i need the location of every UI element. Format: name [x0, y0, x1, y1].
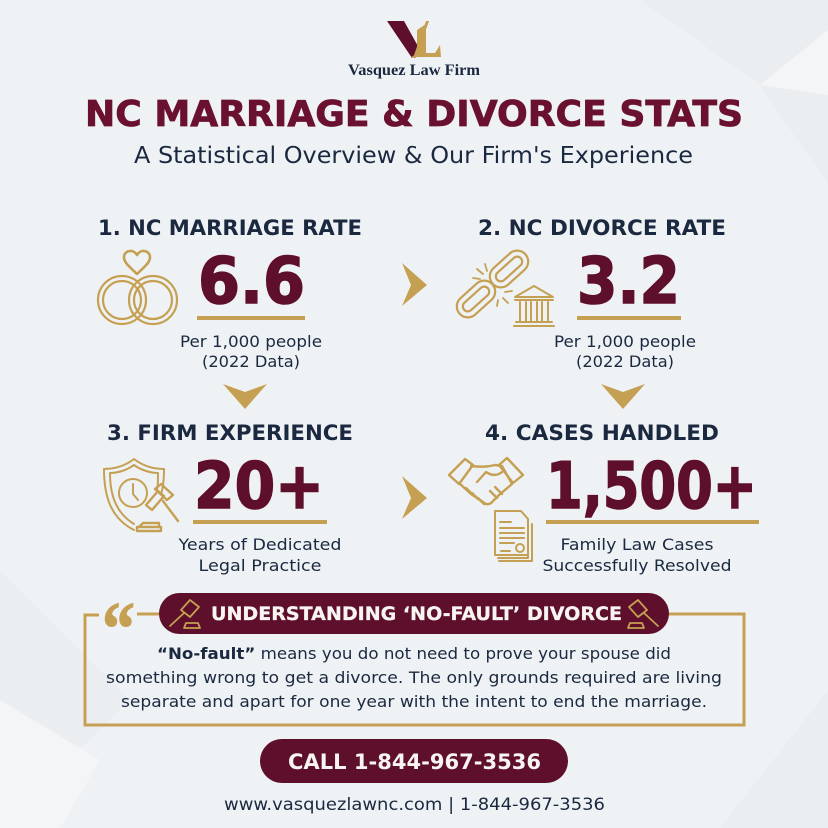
banner heading: UNDERSTANDING ‘NO-FAULT’ DIVORCE — [211, 603, 622, 625]
icon: broken chain and courthouse — [452, 246, 554, 326]
caption: (2022 Data) — [576, 352, 674, 371]
caption: Legal Practice — [198, 556, 322, 575]
caption — [177, 535, 342, 575]
banner — [159, 593, 669, 634]
caption — [180, 332, 322, 371]
arrow: right — [402, 476, 427, 519]
statistic 1,500+: 1,500+ — [546, 450, 757, 524]
caption — [542, 535, 732, 575]
heading: 1. NC MARRIAGE RATE — [98, 216, 362, 240]
callout: no-fault divorce — [85, 587, 744, 725]
caption: Per 1,000 people — [554, 332, 696, 351]
icon: quote mark: “ — [102, 587, 135, 671]
caption: Years of Dedicated — [177, 535, 342, 554]
panel: firm experience — [104, 421, 353, 575]
statistic 3.2: 3.2 — [577, 245, 680, 319]
panel: NC marriage rate — [98, 216, 362, 371]
caption: Successfully Resolved — [542, 556, 732, 575]
callout text — [106, 644, 722, 711]
heading: 3. FIRM EXPERIENCE — [107, 421, 353, 445]
footer contact line: www.vasquezlawnc.com | 1-844-967-3536 — [224, 795, 605, 815]
call button: CALL 1-844-967-3536 — [288, 750, 541, 774]
heading: 2. NC DIVORCE RATE — [478, 216, 726, 240]
callout text: something wrong to get a divorce. The only grounds required are living — [106, 668, 722, 687]
call button — [260, 739, 568, 783]
callout text: “No-fault” means you do not need to prove your spouse did — [157, 644, 671, 663]
icon: gavel left — [170, 600, 200, 628]
arrow: right — [402, 263, 427, 306]
icon: rings and heart — [98, 251, 177, 324]
subtitle: A Statistical Overview & Our Firm's Experience — [134, 143, 693, 169]
heading: 4. CASES HANDLED — [485, 421, 719, 445]
title: NC MARRIAGE & DIVORCE STATS — [85, 94, 743, 135]
icon: gavel right — [628, 600, 658, 628]
panel: NC divorce rate — [452, 216, 726, 371]
logo monogram VL — [387, 21, 441, 58]
arrow: down left — [223, 384, 267, 409]
callout text: separate and apart for one year with the intent to end the marriage. — [121, 692, 707, 711]
icon: shield clock gavel — [104, 459, 178, 531]
statistic 20+: 20+ — [194, 450, 324, 524]
panel: cases handled — [449, 421, 759, 575]
callout frame — [85, 614, 744, 725]
logo: Vasquez Law Firm — [348, 21, 481, 79]
arrow: down right — [601, 384, 645, 409]
caption: Per 1,000 people — [180, 332, 322, 351]
caption: Family Law Cases — [560, 535, 714, 554]
statistic 6.6: 6.6 — [198, 245, 305, 319]
icon: handshake and document — [449, 458, 532, 561]
logo wordmark: Vasquez Law Firm — [348, 62, 481, 79]
caption: (2022 Data) — [202, 352, 300, 371]
caption — [554, 332, 696, 371]
